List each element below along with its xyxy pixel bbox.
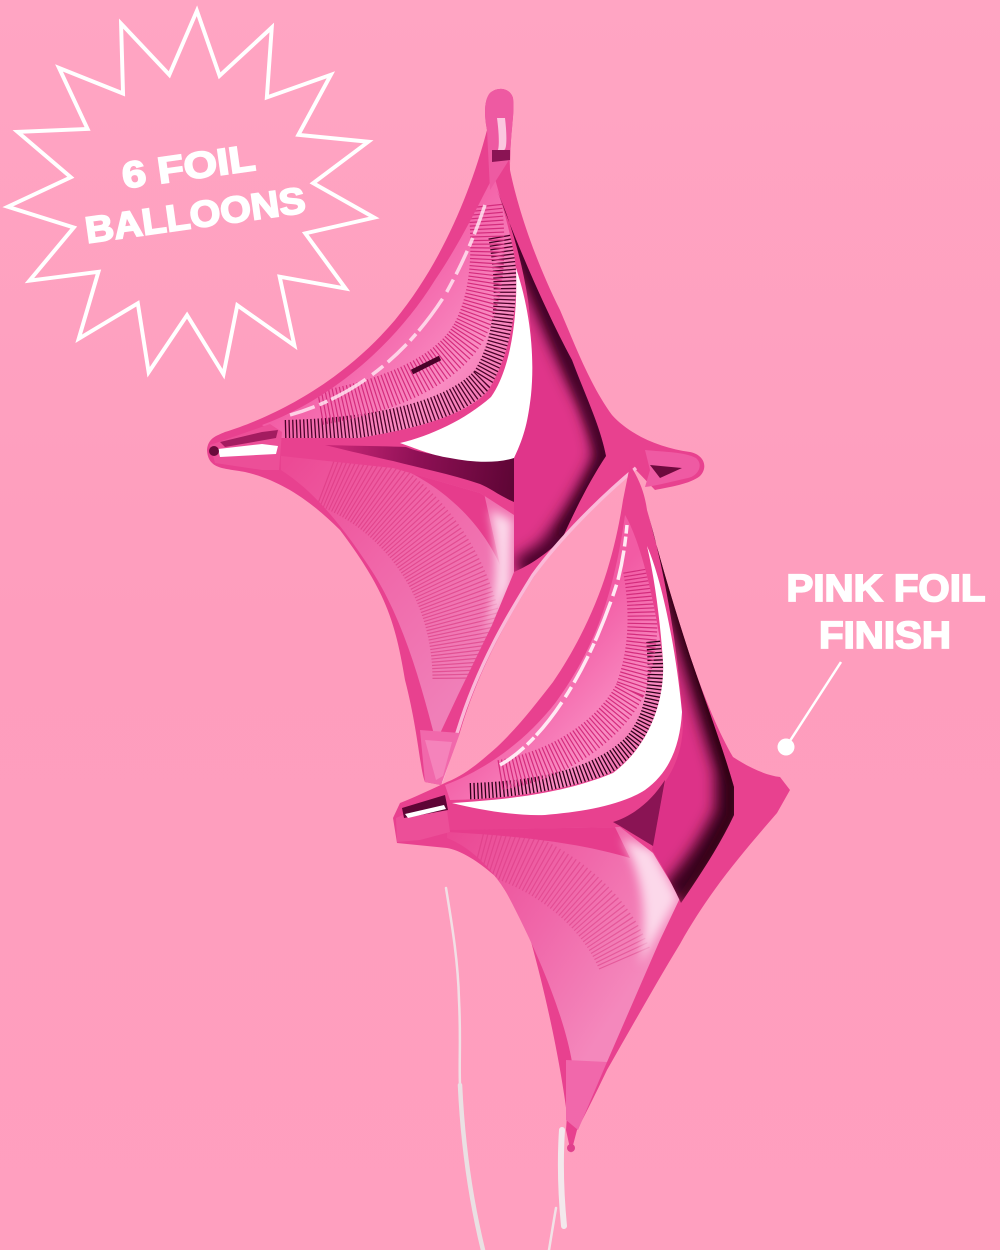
badge starburst	[8, 11, 374, 374]
balloon 1 lower gore pleats	[330, 468, 512, 680]
balloon 1 right facet	[498, 192, 606, 572]
balloon 2 left nozzle	[396, 796, 450, 842]
callout leader line	[786, 662, 841, 747]
balloon 1 bottom tip	[420, 730, 460, 785]
balloon 2 white highlight	[452, 546, 682, 815]
balloon: lower foil star	[393, 465, 790, 1153]
callout: pink foil finish	[778, 568, 986, 756]
balloon 2 bottom tip	[566, 1060, 607, 1130]
balloon 2 lower gore pleats	[447, 823, 678, 965]
badge text: 6 FOIL	[119, 137, 258, 196]
callout text: PINK FOIL	[786, 568, 986, 610]
balloon 1 white highlight	[400, 268, 532, 462]
balloon 2 dark wedge	[613, 780, 665, 846]
balloon 2 lower gore	[447, 827, 680, 1062]
balloon 2 body	[393, 465, 790, 1153]
ribbons	[446, 888, 564, 1250]
balloon 1 upper gore	[262, 175, 516, 438]
balloon 1 right arm	[645, 450, 700, 487]
balloon 2 upper gore	[445, 515, 663, 800]
balloon 2 right facet	[648, 512, 734, 903]
callout: pink foil finish: FINISH	[819, 615, 951, 657]
balloon 1 lower gore	[281, 456, 514, 742]
badge text: BALLOONS	[82, 180, 308, 251]
callout dot	[778, 738, 794, 756]
balloon 1 body	[207, 89, 704, 785]
balloon 1 lower seam	[441, 468, 636, 782]
balloon 1 dark reflection band	[325, 445, 514, 502]
balloon 1 upper gore pleats	[285, 205, 506, 432]
badge: 6 foil balloons	[8, 11, 374, 374]
balloon 2 upper gore pleats	[470, 525, 660, 795]
balloon: upper foil star	[207, 89, 704, 785]
badge text	[76, 131, 308, 251]
balloon 1 top nozzle	[485, 89, 513, 190]
balloon 1 left nozzle	[210, 424, 282, 470]
